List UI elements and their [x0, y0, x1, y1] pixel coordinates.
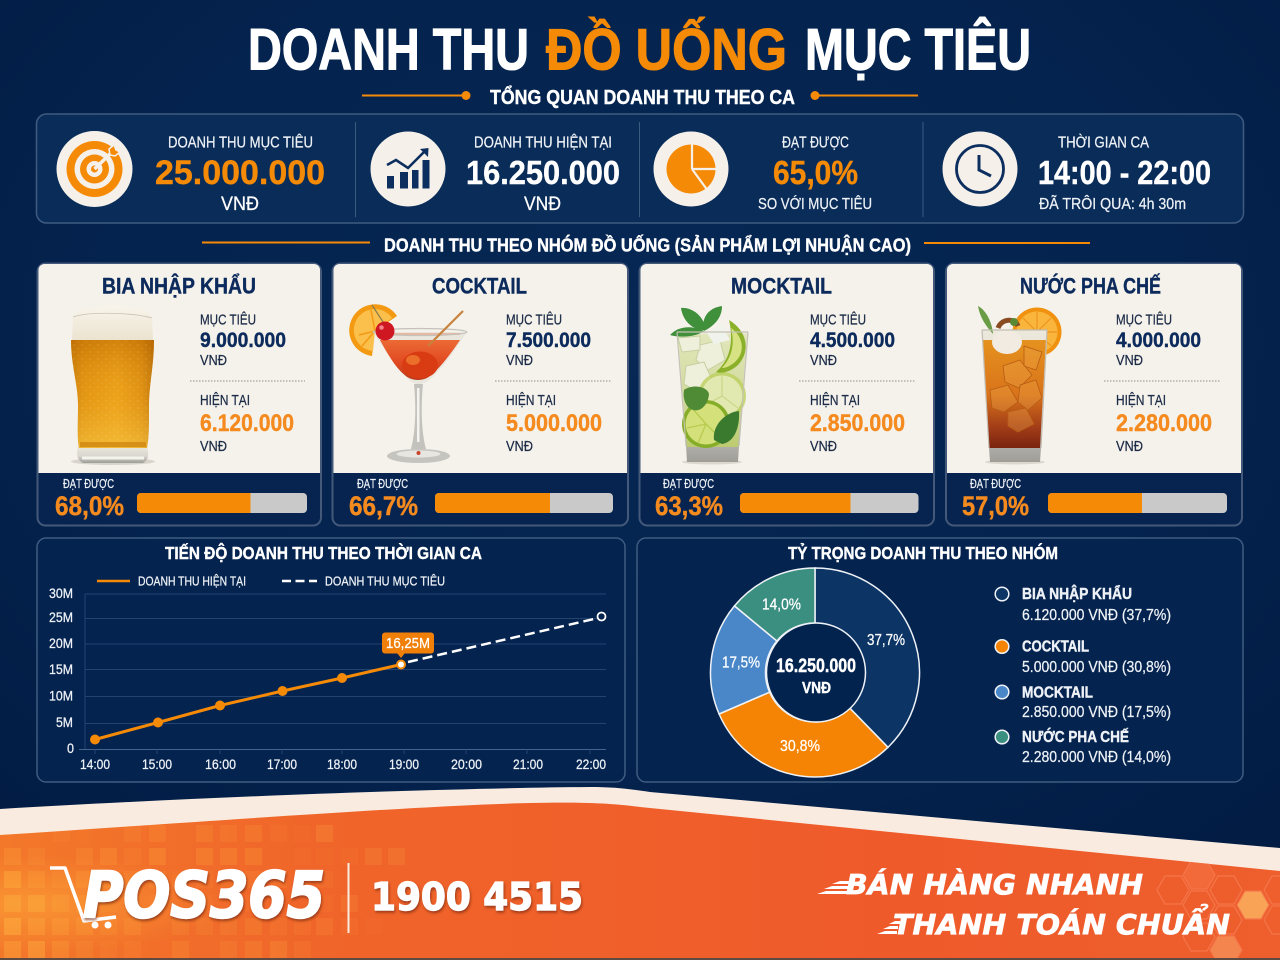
icon: beer glass — [71, 306, 155, 465]
progress: 63,3%: 63,3% — [655, 491, 723, 521]
y-axis labels: 20M — [49, 636, 73, 651]
x-axis labels: 20:00 — [451, 757, 482, 772]
donut legend: MOCKTAIL — [1022, 684, 1093, 702]
y-axis labels: 10M — [49, 688, 73, 704]
actual revenue line — [90, 660, 405, 744]
donut labels: 17,5% — [722, 654, 760, 672]
progress: 63,3% — [655, 477, 918, 521]
stats: target and current: VNĐ — [200, 353, 227, 369]
icon: clock — [942, 132, 1018, 206]
KPI: current revenue: VNĐ — [524, 194, 561, 215]
slogan: THANH TOÁN CHUẨN — [893, 902, 1230, 941]
stats: target and current: MỤC TIÊU — [506, 312, 562, 328]
donut legend: 5.000.000 VNĐ (30,8%) — [1022, 659, 1171, 676]
callout: 16,25M — [382, 632, 434, 658]
progress: 57,0%: 57,0% — [962, 491, 1029, 521]
title — [248, 18, 1031, 82]
stats: target and current: HIỆN TẠI — [506, 392, 556, 409]
KPI: current revenue — [370, 132, 620, 215]
KPI: achieved percent: 65,0% — [773, 155, 858, 192]
chart legend: DOANH THU MỤC TIÊU — [325, 574, 445, 588]
KPI: shift time — [942, 132, 1211, 213]
donut chart — [710, 568, 919, 777]
progress: 68,0% — [55, 477, 307, 521]
stats: target and current: VNĐ — [810, 353, 837, 369]
title: ĐỒ UỐNG — [546, 18, 787, 82]
stats: target and current: HIỆN TẠI — [810, 392, 860, 409]
x-axis labels — [80, 757, 606, 772]
stats: target and current: 4.000.000 — [1116, 329, 1201, 352]
KPI: target revenue: VNĐ — [221, 194, 259, 215]
panel: mixed drinks card: NƯỚC PHA CHẾ — [1020, 274, 1161, 298]
progress: 66,7% — [349, 477, 613, 521]
x-axis labels: 15:00 — [142, 757, 172, 772]
title: MỤC TIÊU — [805, 18, 1031, 82]
stats: target and current: HIỆN TẠI — [200, 392, 250, 409]
stats: target and current: MỤC TIÊU — [810, 312, 866, 328]
y-axis labels: 25M — [49, 610, 73, 625]
chart legend — [97, 574, 445, 588]
donut center total: VNĐ — [802, 680, 831, 697]
KPI: target revenue: 25.000.000 — [155, 154, 325, 192]
stats: target and current: VNĐ — [1116, 353, 1143, 369]
y-axis labels: 5M — [56, 715, 73, 730]
progress: 57,0%: ĐẠT ĐƯỢC — [970, 477, 1021, 491]
progress: 66,7%: 66,7% — [349, 491, 418, 521]
panel: revenue share donut: TỶ TRỌNG DOANH THU THEO NHÓM — [788, 542, 1058, 563]
slogan: BÁN HÀNG NHANH — [846, 867, 1143, 901]
progress: 66,7%: ĐẠT ĐƯỢC — [357, 477, 408, 491]
panel: mixed drinks card — [946, 264, 1242, 526]
stats: target and current: 5.000.000 — [506, 410, 602, 437]
section heading: beverage groups: DOANH THU THEO NHÓM ĐỒ UỐNG (SẢN PHẨM LỢI NHUẬN CAO) — [384, 234, 911, 256]
progress: 57,0% — [962, 477, 1227, 521]
KPI: achieved percent: SO VỚI MỤC TIÊU — [758, 194, 872, 213]
stats: target and current: 2.850.000 — [810, 410, 905, 437]
panel: mocktail card: MOCKTAIL — [731, 274, 832, 298]
x-axis labels: 16:00 — [205, 757, 236, 772]
stats: target and current — [190, 312, 305, 455]
donut center total — [776, 656, 856, 697]
KPI: target revenue — [56, 131, 325, 215]
progress: 63,3%: ĐẠT ĐƯỢC — [663, 477, 714, 491]
donut labels: 30,8% — [780, 738, 820, 755]
y-axis labels: 15M — [49, 662, 73, 677]
icon: target — [56, 131, 132, 207]
stats: target and current: 4.500.000 — [810, 329, 895, 352]
panel: imported beer card — [38, 264, 321, 526]
icon: mocktail glass — [670, 306, 748, 464]
callout: 16,25M: 16,25M — [386, 635, 430, 652]
KPI: target revenue: DOANH THU MỤC TIÊU — [168, 132, 313, 152]
donut legend: COCKTAIL — [1022, 638, 1089, 656]
donut legend: BIA NHẬP KHẨU — [1022, 584, 1132, 603]
hotline: 1900 4515 — [371, 875, 583, 919]
stats: target and current: VNĐ — [506, 353, 533, 369]
stats: target and current: 9.000.000 — [200, 329, 286, 352]
icon: shopping cart — [50, 868, 116, 928]
chart legend: DOANH THU HIỆN TẠI — [138, 574, 246, 588]
subtitle: overview — [362, 85, 918, 109]
stats: target and current: MỤC TIÊU — [200, 312, 256, 328]
panel: imported beer card: BIA NHẬP KHẨU — [102, 274, 256, 298]
x-axis labels: 19:00 — [389, 757, 419, 772]
icon: rising bar chart — [370, 132, 446, 206]
target dashed line — [408, 612, 606, 662]
panel: revenue progress line chart — [37, 538, 625, 782]
progress: 68,0%: 68,0% — [55, 491, 124, 521]
donut legend — [995, 584, 1171, 766]
donut labels: 37,7% — [867, 632, 905, 649]
stats: target and current: VNĐ — [506, 439, 533, 455]
KPI: shift time: ĐÃ TRÔI QUA: 4h 30m — [1039, 193, 1186, 213]
donut center total: 16.250.000 — [776, 656, 856, 677]
stats: target and current: 7.500.000 — [506, 329, 591, 352]
title: DOANH THU — [248, 18, 529, 82]
icon: cocktail glass — [349, 304, 467, 463]
donut legend: 2.850.000 VNĐ (17,5%) — [1022, 704, 1171, 721]
stats: target and current — [495, 312, 612, 455]
stats: target and current: VNĐ — [810, 439, 837, 455]
stats: target and current: HIỆN TẠI — [1116, 392, 1166, 409]
slogan — [817, 867, 1230, 941]
KPI: shift time: THỜI GIAN CA — [1058, 132, 1149, 152]
donut legend: 6.120.000 VNĐ (37,7%) — [1022, 607, 1171, 624]
logo: POS365: POS365 — [83, 859, 325, 932]
panel: summary KPIs — [36, 114, 1244, 223]
icon: iced drink — [978, 306, 1062, 464]
footer banner — [0, 787, 1280, 960]
panel: revenue progress line chart: TIẾN ĐỘ DOANH THU THEO THỜI GIAN CA — [165, 542, 482, 563]
stats: target and current — [1104, 312, 1221, 455]
panel: mocktail card — [640, 264, 934, 526]
KPI: achieved percent — [654, 132, 872, 213]
x-axis labels: 14:00 — [80, 757, 110, 772]
stats: target and current: 6.120.000 — [200, 410, 294, 437]
panel: cocktail card: COCKTAIL — [432, 274, 527, 298]
stats: target and current: 2.280.000 — [1116, 410, 1212, 437]
donut labels: 14,0% — [762, 596, 801, 614]
stats: target and current: VNĐ — [1116, 439, 1143, 455]
KPI: shift time: 14:00 - 22:00 — [1038, 155, 1211, 192]
panel: cocktail card — [332, 264, 628, 526]
icon: pie chart — [654, 132, 728, 206]
y-axis labels: 0 — [67, 741, 74, 756]
donut legend: NƯỚC PHA CHẾ — [1022, 727, 1129, 746]
KPI: achieved percent: ĐẠT ĐƯỢC — [782, 134, 849, 152]
donut labels — [722, 596, 905, 755]
KPI: current revenue: 16.250.000 — [466, 155, 620, 192]
x-axis labels: 17:00 — [267, 757, 297, 772]
x-axis labels: 18:00 — [327, 757, 357, 772]
panel: revenue share donut — [637, 538, 1243, 782]
progress: 68,0%: ĐẠT ĐƯỢC — [63, 477, 114, 491]
stats: target and current: MỤC TIÊU — [1116, 312, 1172, 328]
x-axis labels: 22:00 — [576, 757, 606, 772]
x-axis labels: 21:00 — [513, 757, 543, 772]
y-axis labels — [49, 586, 74, 756]
KPI: current revenue: DOANH THU HIỆN TẠI — [474, 132, 612, 152]
donut legend: 2.280.000 VNĐ (14,0%) — [1022, 749, 1171, 766]
stats: target and current — [799, 312, 915, 455]
stats: target and current: VNĐ — [200, 439, 227, 455]
y-axis labels: 30M — [49, 586, 73, 601]
subtitle: overview: TỔNG QUAN DOANH THU THEO CA — [490, 85, 795, 109]
